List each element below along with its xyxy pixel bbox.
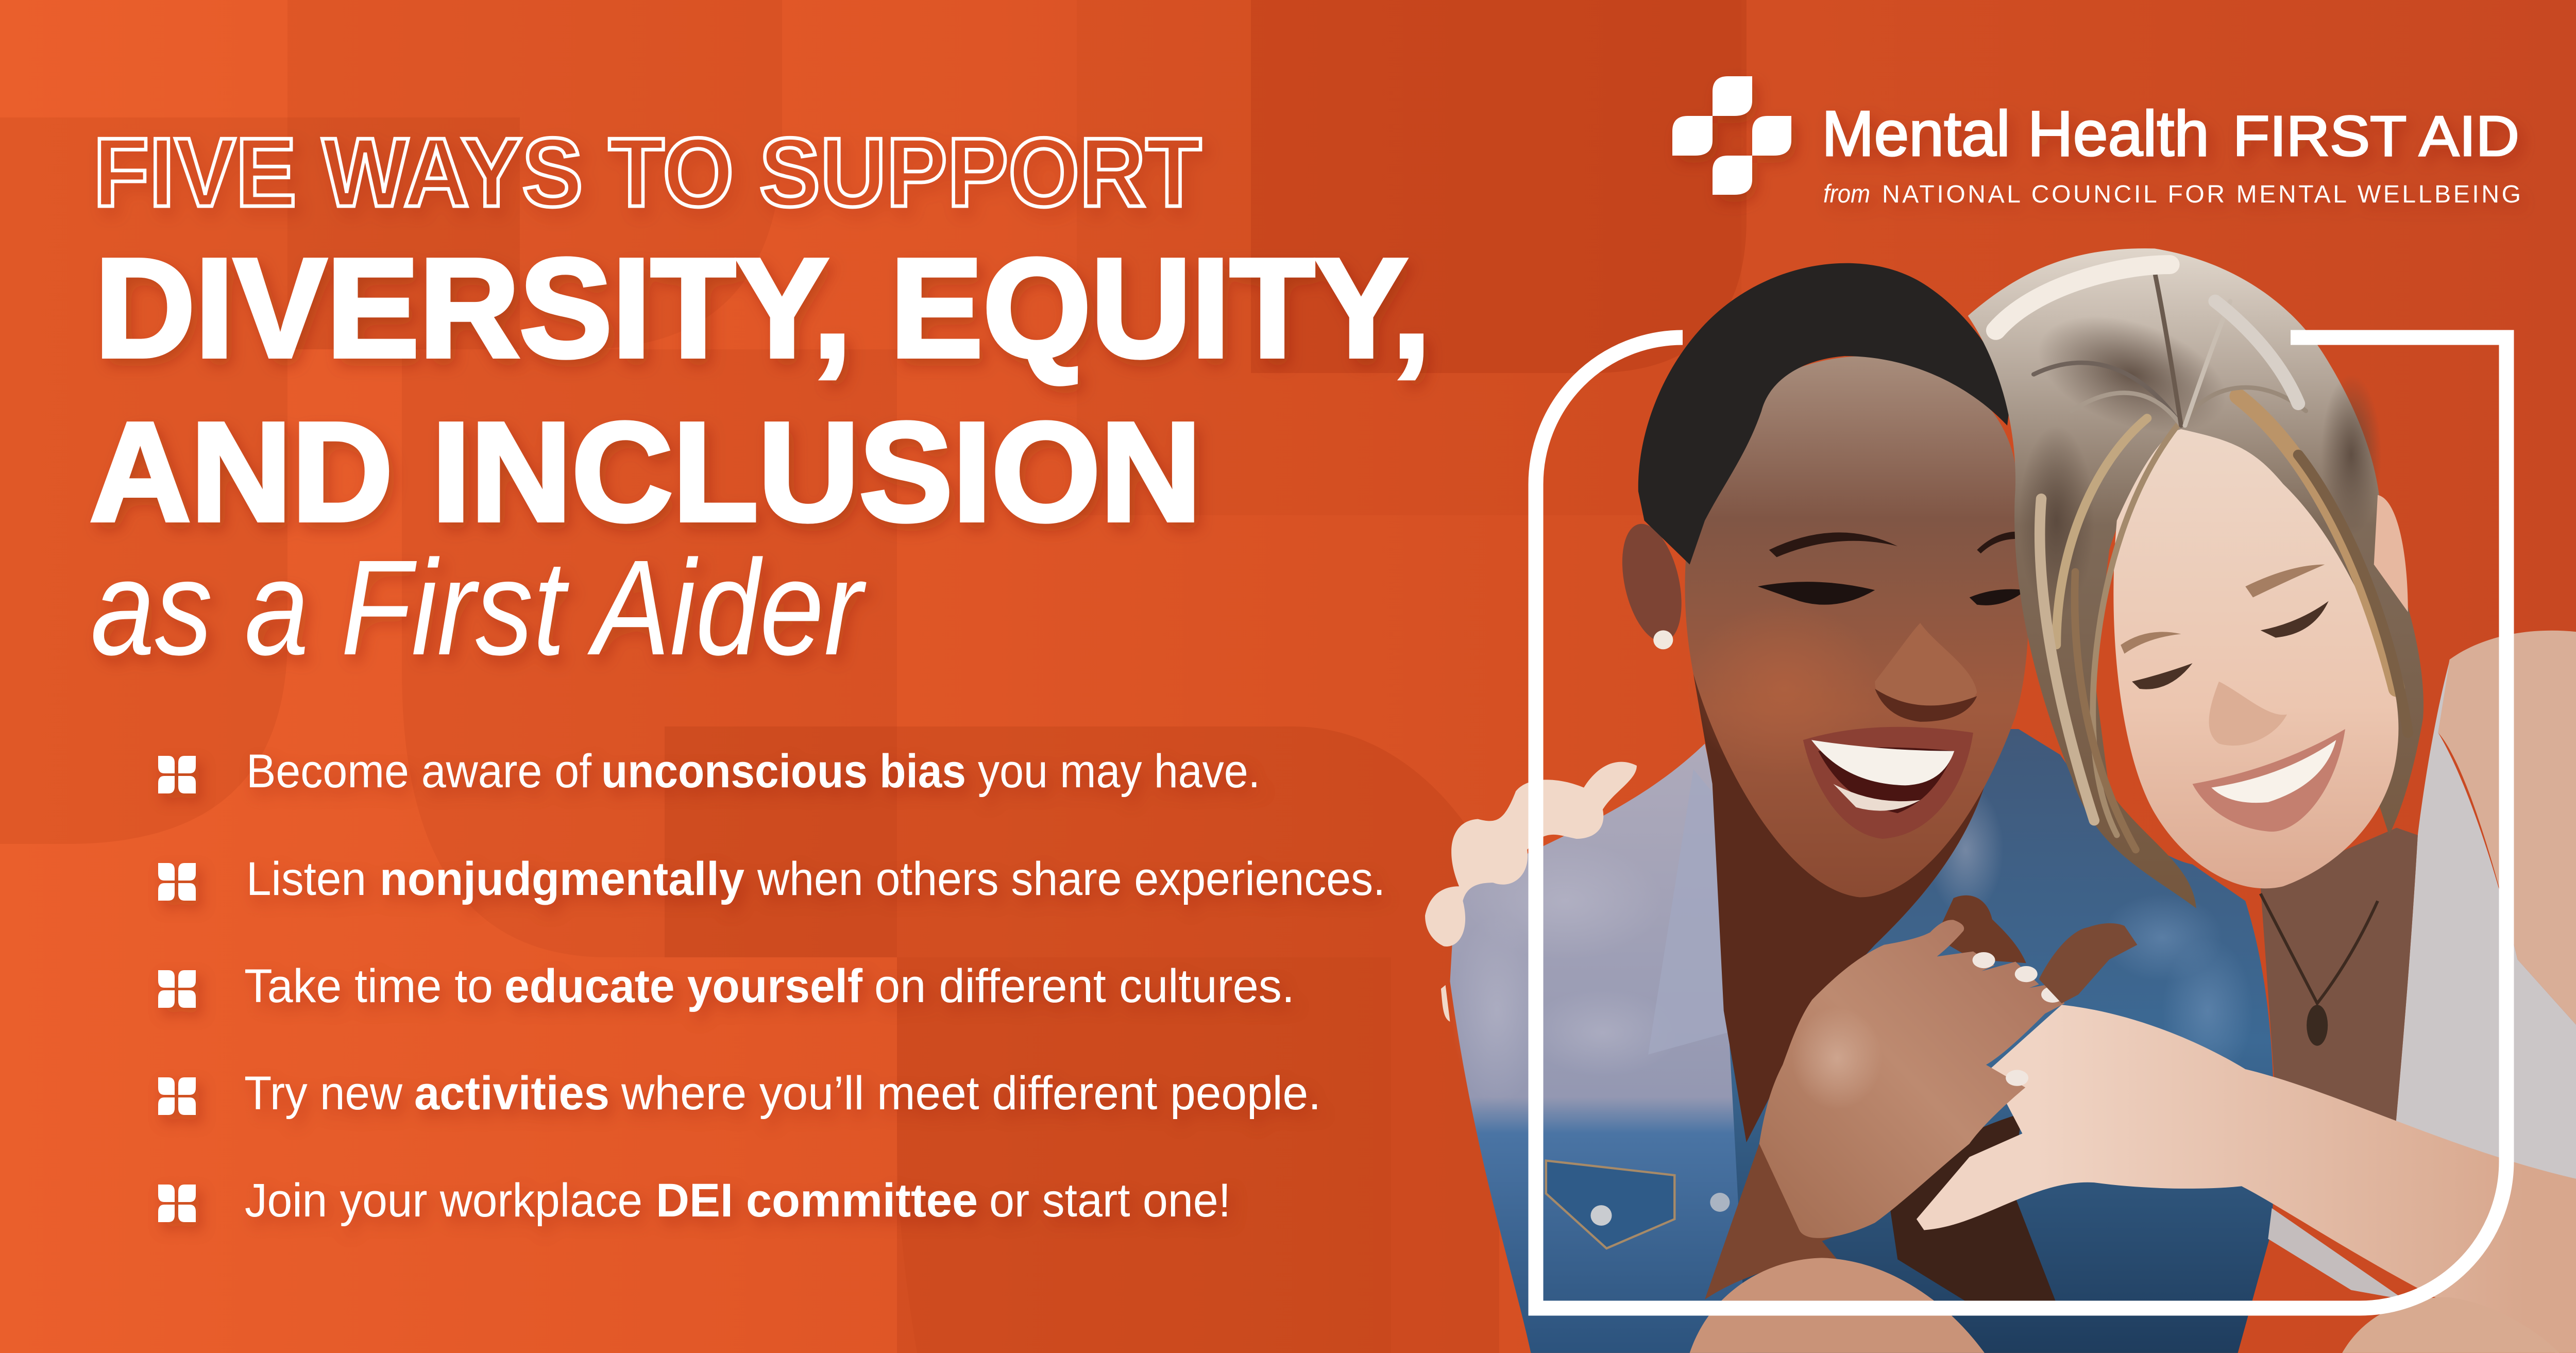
right woman's closed eye [2261, 601, 2329, 638]
right woman's necklace [2261, 893, 2378, 1003]
logo tagline organisation: NATIONAL COUNCIL FOR MENTAL WELLBEING [1882, 181, 2521, 208]
bullet 3 [158, 970, 196, 1008]
left woman's ear [1613, 519, 1691, 647]
right woman's forearm and hand [1917, 1005, 2576, 1353]
item 4: Try new [244, 1067, 403, 1120]
right knee [2342, 1297, 2559, 1353]
right woman's shirt hem [2268, 1208, 2404, 1299]
item 2 [246, 853, 1385, 905]
left woman's fingernails [1973, 952, 2064, 1086]
hand on shoulder [1425, 762, 1637, 946]
dark wrist and shadow behind hands [1890, 1113, 2056, 1311]
item 2: Listen [246, 853, 366, 905]
left woman's hand highlight [1792, 1007, 1883, 1109]
left woman's face [1685, 356, 2029, 898]
photo: two laughing women [1425, 248, 2576, 1353]
bullet 2 [158, 863, 196, 901]
jacket collar seam [1648, 769, 1727, 1055]
left woman's earring [1653, 630, 1673, 649]
item 2: nonjudgmentally [380, 853, 744, 905]
left woman's other thumb [2039, 923, 2137, 1003]
title line 3 italic: as a First Aider [91, 532, 867, 683]
item 1 [246, 745, 1260, 798]
left woman's nose [1875, 623, 1977, 713]
item 4: where you’ll meet different people. [621, 1067, 1321, 1120]
bullet 4 [158, 1077, 196, 1115]
title block [90, 118, 1431, 683]
jacket button [1590, 1205, 1612, 1226]
logo cross icon [1672, 76, 1791, 195]
right woman's lips [2193, 729, 2345, 832]
item 5 [245, 1174, 1231, 1227]
title line 2: AND INCLUSION [90, 393, 1201, 550]
item 3 [244, 960, 1295, 1012]
right woman's hair strands [1996, 265, 2408, 850]
right woman's second eye [2132, 663, 2193, 689]
left woman's left brow [1769, 532, 1897, 557]
jacket mottling [1451, 784, 2253, 1106]
logo wordmark first aid: FIRST AID [2233, 105, 2519, 168]
item 5: or start one! [989, 1174, 1231, 1227]
left woman's neck and chest [1693, 674, 2011, 1142]
left woman's left eye [1758, 582, 1875, 605]
left woman's right eye [1970, 589, 2026, 605]
right woman's nose shadow [2209, 682, 2287, 746]
item 2: when others share experiences. [757, 853, 1385, 905]
left woman's nostril shadow [1875, 689, 1977, 722]
right woman's tank top [2393, 661, 2576, 1208]
item 1: you may have. [978, 745, 1260, 798]
left woman's forearm [1705, 1144, 1852, 1299]
item 4 [244, 1067, 1321, 1120]
left woman's jacket left side [1450, 743, 1769, 1353]
right woman's neck and chest [2261, 828, 2418, 1157]
left woman's upper teeth [1811, 740, 1954, 785]
title outline line: FIVE WAYS TO SUPPORT [93, 118, 1201, 227]
pendant [2307, 1005, 2328, 1046]
photo frame [1536, 337, 2506, 1308]
fingertip under jacket [1441, 985, 1450, 1022]
right woman's ear [2374, 495, 2408, 612]
right woman's other brow [2121, 632, 2181, 654]
left woman's lower teeth [1833, 784, 1920, 811]
right woman's hair mass [1968, 248, 2424, 908]
title line 1: DIVERSITY, EQUITY, [95, 229, 1431, 386]
logo: Mental Health First Aid [1672, 76, 2521, 208]
logo tagline from: from [1823, 179, 1870, 208]
right woman's dark hair centre [2019, 294, 2381, 616]
left woman's thumb behind [1936, 895, 2026, 963]
left knee [1690, 1258, 1985, 1353]
item 3: educate yourself [504, 960, 862, 1012]
right woman's shoulder and arm [2438, 631, 2576, 1025]
item 1: Become aware of [246, 745, 591, 798]
item 4: activities [414, 1067, 609, 1120]
jacket second button [1710, 1193, 1730, 1212]
list of five ways [158, 745, 1385, 1227]
bullet 5 [158, 1185, 196, 1222]
bullet 1 [158, 756, 196, 793]
item 5: Join your workplace [245, 1174, 642, 1227]
left woman's short hair [1638, 263, 2011, 565]
left woman's jacket right side [1724, 729, 2274, 1353]
item 3: on different cultures. [874, 960, 1295, 1012]
left woman's right brow [1977, 532, 2017, 553]
right woman's brow [2245, 565, 2325, 597]
left woman's mouth interior [1818, 748, 1954, 813]
right woman's teeth [2211, 740, 2336, 803]
item 5: DEI committee [656, 1174, 978, 1227]
right woman's face [2113, 429, 2398, 888]
item 3: Take time to [244, 960, 493, 1012]
left woman's cheek glow [1686, 601, 1883, 776]
left woman's mouth lips [1803, 727, 1973, 839]
left woman's hand [1759, 920, 2065, 1238]
logo wordmark: Mental Health [1822, 98, 2209, 170]
item 1: unconscious bias [601, 745, 966, 798]
jacket pocket [1546, 1161, 1674, 1248]
